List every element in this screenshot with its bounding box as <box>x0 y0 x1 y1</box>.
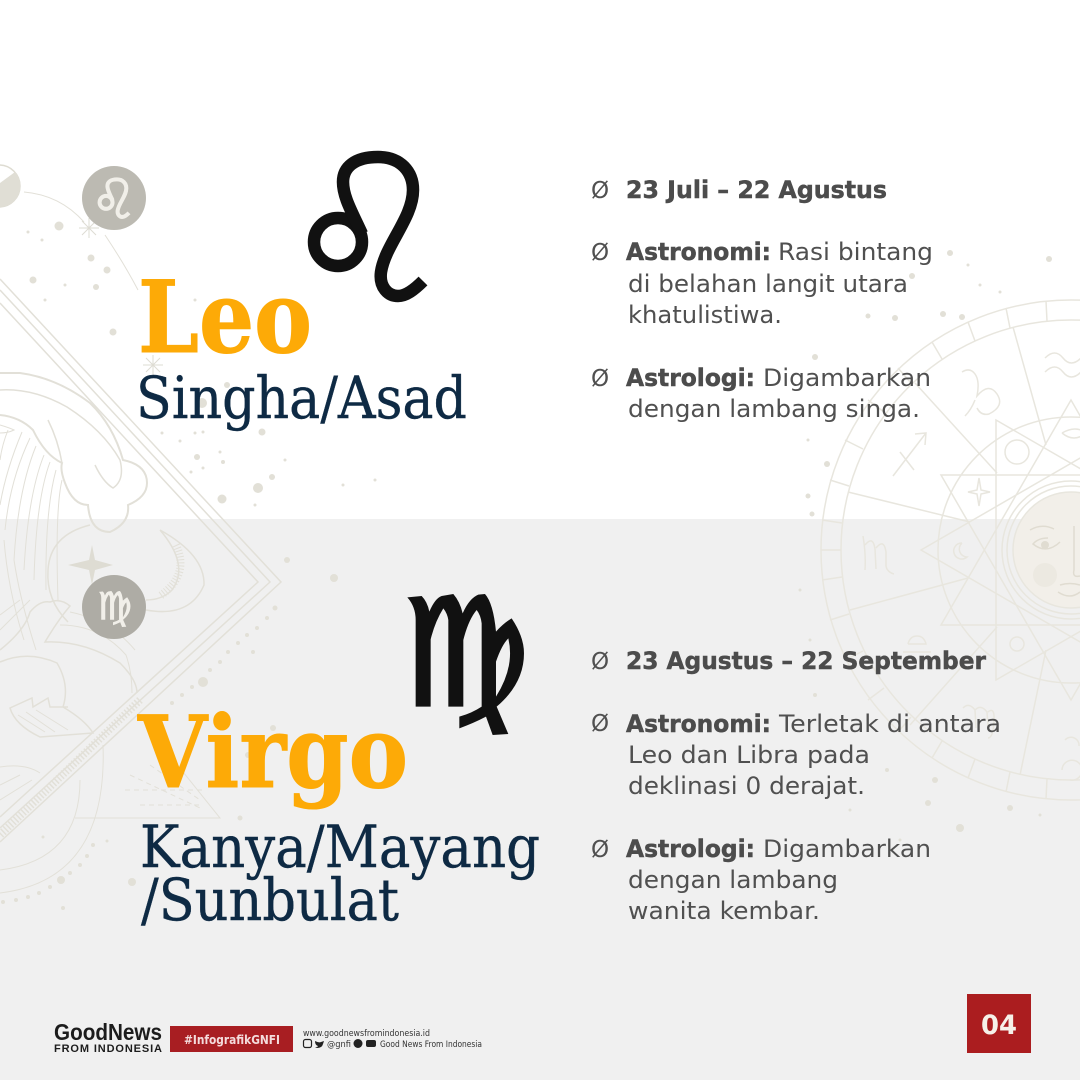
contact and social links: Good News From Indonesia <box>380 1040 482 1050</box>
bullet list: Leo facts: Ø <box>591 240 609 266</box>
page number: 04 <box>981 1010 1017 1041</box>
icon: large Leo symbol <box>314 157 423 296</box>
page number <box>967 994 1031 1053</box>
bullet list: Virgo facts: wanita kembar. <box>628 897 820 925</box>
heading: Leo: Leo <box>138 260 312 376</box>
bullet list: Leo facts: dengan lambang singa. <box>628 395 920 423</box>
icon: large Virgo symbol <box>407 594 524 735</box>
bullet list: Virgo facts: Leo dan Libra pada <box>628 741 870 769</box>
moon phase decoration <box>0 165 20 207</box>
logo: GoodNews from Indonesia <box>54 1019 162 1055</box>
contact and social links: www.goodnewsfromindonesia.id <box>303 1029 430 1039</box>
bullet list: Leo facts: Astronomi: <box>626 238 771 266</box>
subtitle: Kanya/Mayang/Sunbulat: Kanya/Mayang <box>140 813 540 881</box>
bullet list: Virgo facts <box>591 647 1001 925</box>
bullet list: Leo facts: Ø <box>591 178 609 204</box>
heading: Virgo: Virgo <box>137 695 408 811</box>
bullet list: Leo facts: Ø <box>591 366 609 392</box>
subtitle: Singha/Asad: Singha/Asad <box>136 364 467 432</box>
section: Leo <box>82 157 933 432</box>
bullet list: Virgo facts: Astronomi: <box>626 710 771 738</box>
contact and social links <box>303 1029 482 1050</box>
diamond frame and wave decoration <box>0 192 281 893</box>
bullet list: Virgo facts: deklinasi 0 derajat. <box>628 772 865 800</box>
bullet list: Virgo facts: Digambarkan <box>763 835 931 863</box>
bullet list: Leo facts: 23 Juli – 22 Agustus <box>626 176 887 204</box>
bullet list: Virgo facts: dengan lambang <box>628 866 838 894</box>
bullet list: Virgo facts: 23 Agustus – 22 September <box>626 647 986 675</box>
icon: small Leo badge <box>82 166 146 230</box>
background bottom panel <box>0 519 1080 1080</box>
contact and social links: @gnfi <box>327 1040 351 1050</box>
subtitle: Kanya/Mayang/Sunbulat <box>140 813 540 934</box>
footer <box>54 994 1031 1055</box>
icon: small Virgo badge <box>82 575 146 639</box>
bullet list: Leo facts: khatulistiwa. <box>628 301 782 329</box>
bullet list: Virgo facts: Ø <box>591 837 609 863</box>
hashtag badge: #InfografikGNFI <box>184 1033 280 1047</box>
bullet list: Virgo facts: Ø <box>591 711 609 737</box>
logo: GoodNews from Indonesia: GoodNews <box>54 1019 162 1045</box>
astrological wheel decoration <box>821 300 1080 800</box>
bullet list: Leo facts: Digambarkan <box>763 364 931 392</box>
background top panel <box>0 0 1080 519</box>
subtitle: Kanya/Mayang/Sunbulat: /Sunbulat <box>141 866 399 934</box>
bullet list: Leo facts <box>591 176 933 423</box>
bullet list: Leo facts: Astrologi: <box>626 364 755 392</box>
bullet list: Leo facts: di belahan langit utara <box>628 270 908 298</box>
star decoration <box>68 218 163 585</box>
bullet list: Leo facts: Rasi bintang <box>778 238 933 266</box>
bullet list: Virgo facts: Terletak di antara <box>778 710 1001 738</box>
bullet list: Virgo facts: Astrologi: <box>626 835 755 863</box>
hashtag badge <box>170 1026 293 1052</box>
logo: GoodNews from Indonesia: FROM INDONESIA <box>54 1043 162 1055</box>
bullet list: Virgo facts: Ø <box>591 649 609 675</box>
scattered star dots <box>1 222 1052 910</box>
section: Virgo <box>82 575 1001 934</box>
